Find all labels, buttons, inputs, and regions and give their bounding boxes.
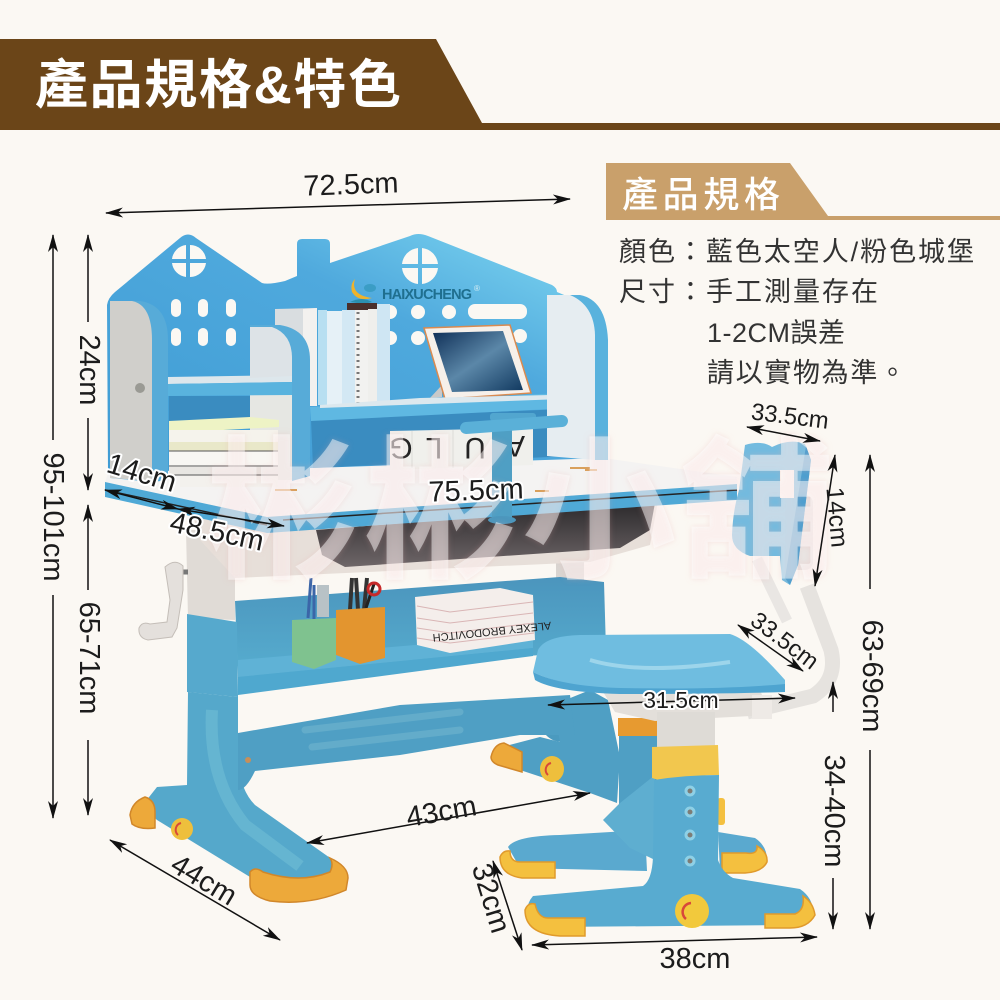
stacked books on lower shelf bbox=[415, 588, 552, 653]
middle divider panel bbox=[250, 325, 310, 481]
chair foot caps bbox=[525, 904, 585, 936]
dimension: foot depth 44cm: 44cm bbox=[165, 848, 242, 912]
brand logo bbox=[350, 279, 480, 304]
book stand clamp bbox=[466, 413, 562, 524]
under-desk shelf bbox=[235, 577, 606, 695]
dimension: seat height 34-40cm: 34-40cm bbox=[818, 755, 850, 867]
dimension: seat depth 33.5cm: 33.5cm bbox=[745, 607, 824, 675]
dimension: total height 95-101cm: 95-101cm bbox=[37, 453, 69, 581]
left foot badge bbox=[171, 818, 193, 840]
right desk leg and foot bbox=[491, 556, 620, 803]
desk illustration bbox=[105, 234, 737, 902]
left foot caps bbox=[130, 797, 155, 828]
dimension: desk depth 48.5cm: 48.5cm bbox=[167, 507, 267, 558]
desk left post and leg bbox=[130, 530, 348, 902]
title banner bbox=[0, 39, 1000, 130]
chair backrest bbox=[732, 442, 833, 712]
dimension: desk width 75.5cm: 75.5cm bbox=[428, 473, 524, 509]
dimension: hutch height 24cm: 24cm bbox=[73, 335, 105, 405]
left side panel bbox=[110, 301, 168, 482]
stacked books upper shelf bbox=[169, 417, 279, 487]
dimension: shelf depth 14cm: 14cm bbox=[103, 448, 180, 499]
stacked books on lower shelf: ALEXEY BRODOVITCH bbox=[432, 619, 552, 643]
dimension: top width 72.5cm: 72.5cm bbox=[303, 167, 399, 203]
chair seat underside bbox=[602, 690, 772, 721]
column bolts bbox=[686, 787, 694, 865]
dimension: seat width 31.5cm bbox=[548, 687, 795, 713]
dimension: chair foot width 38cm: 38cm bbox=[660, 943, 730, 975]
footrest bbox=[603, 775, 655, 860]
brand logo: ® bbox=[474, 284, 480, 293]
specification list: 請以實物為準。 bbox=[707, 358, 907, 388]
chair column bbox=[525, 712, 815, 936]
chair seat bbox=[533, 634, 785, 694]
dimension: chair total height 63-69cm: 63-69cm bbox=[856, 620, 888, 732]
desk crossbar bbox=[238, 695, 575, 790]
chair rear foot bbox=[500, 798, 767, 878]
specification list bbox=[619, 237, 975, 388]
desk underside and drawer bbox=[190, 490, 660, 578]
dimension: chair foot depth 32cm: 32cm bbox=[465, 860, 516, 937]
crank handle bbox=[139, 562, 188, 640]
specification list: 1-2CM誤差 bbox=[707, 318, 846, 348]
dimension: seat width 31.5cm: 31.5cm bbox=[643, 687, 719, 713]
dimension: leg span 43cm bbox=[307, 790, 590, 843]
dimension: desk height 65-71cm: 65-71cm bbox=[73, 602, 105, 714]
letter blocks: G bbox=[389, 431, 413, 464]
chair badge bbox=[675, 894, 709, 928]
dimension: chair foot width 38cm bbox=[532, 937, 817, 975]
letter blocks bbox=[389, 428, 533, 470]
letter blocks: A bbox=[505, 429, 525, 462]
watermark: 彬彬小舖 bbox=[205, 426, 835, 599]
brand logo: HAIXUCHENG bbox=[382, 287, 472, 303]
chair illustration bbox=[500, 442, 833, 936]
dimension: backrest height 14cm bbox=[815, 455, 853, 586]
desktop surface bbox=[105, 450, 737, 533]
hutch lower shelf bbox=[310, 393, 592, 468]
dimension: foot depth 44cm bbox=[110, 840, 280, 940]
chair rear column with collar bbox=[618, 718, 658, 806]
specifications heading: 產品規格 bbox=[622, 174, 780, 215]
letter blocks: U bbox=[464, 431, 486, 464]
hutch upper left shelf bbox=[168, 375, 292, 480]
title text: 產品規格&特色 bbox=[35, 56, 401, 115]
specification list: 尺寸：手工測量存在 bbox=[619, 277, 879, 307]
upright books bbox=[275, 304, 390, 406]
hutch back panel bbox=[107, 234, 604, 472]
dimension: leg span 43cm: 43cm bbox=[404, 790, 479, 834]
specification list: 顏色：藍色太空人/粉色城堡 bbox=[619, 237, 975, 267]
dimension: top width 72.5cm bbox=[106, 167, 570, 213]
tablet bbox=[424, 325, 531, 399]
panel: product specifications bbox=[606, 163, 1000, 388]
right side panel bbox=[547, 295, 608, 460]
letter blocks: L bbox=[426, 431, 442, 464]
hutch windows and holes bbox=[171, 245, 527, 346]
dimension: backrest width 33.5cm: 33.5cm bbox=[750, 398, 830, 435]
small dark block on books bbox=[347, 303, 377, 310]
pen holders bbox=[292, 578, 385, 669]
dimension: backrest height 14cm: 14cm bbox=[820, 486, 853, 549]
